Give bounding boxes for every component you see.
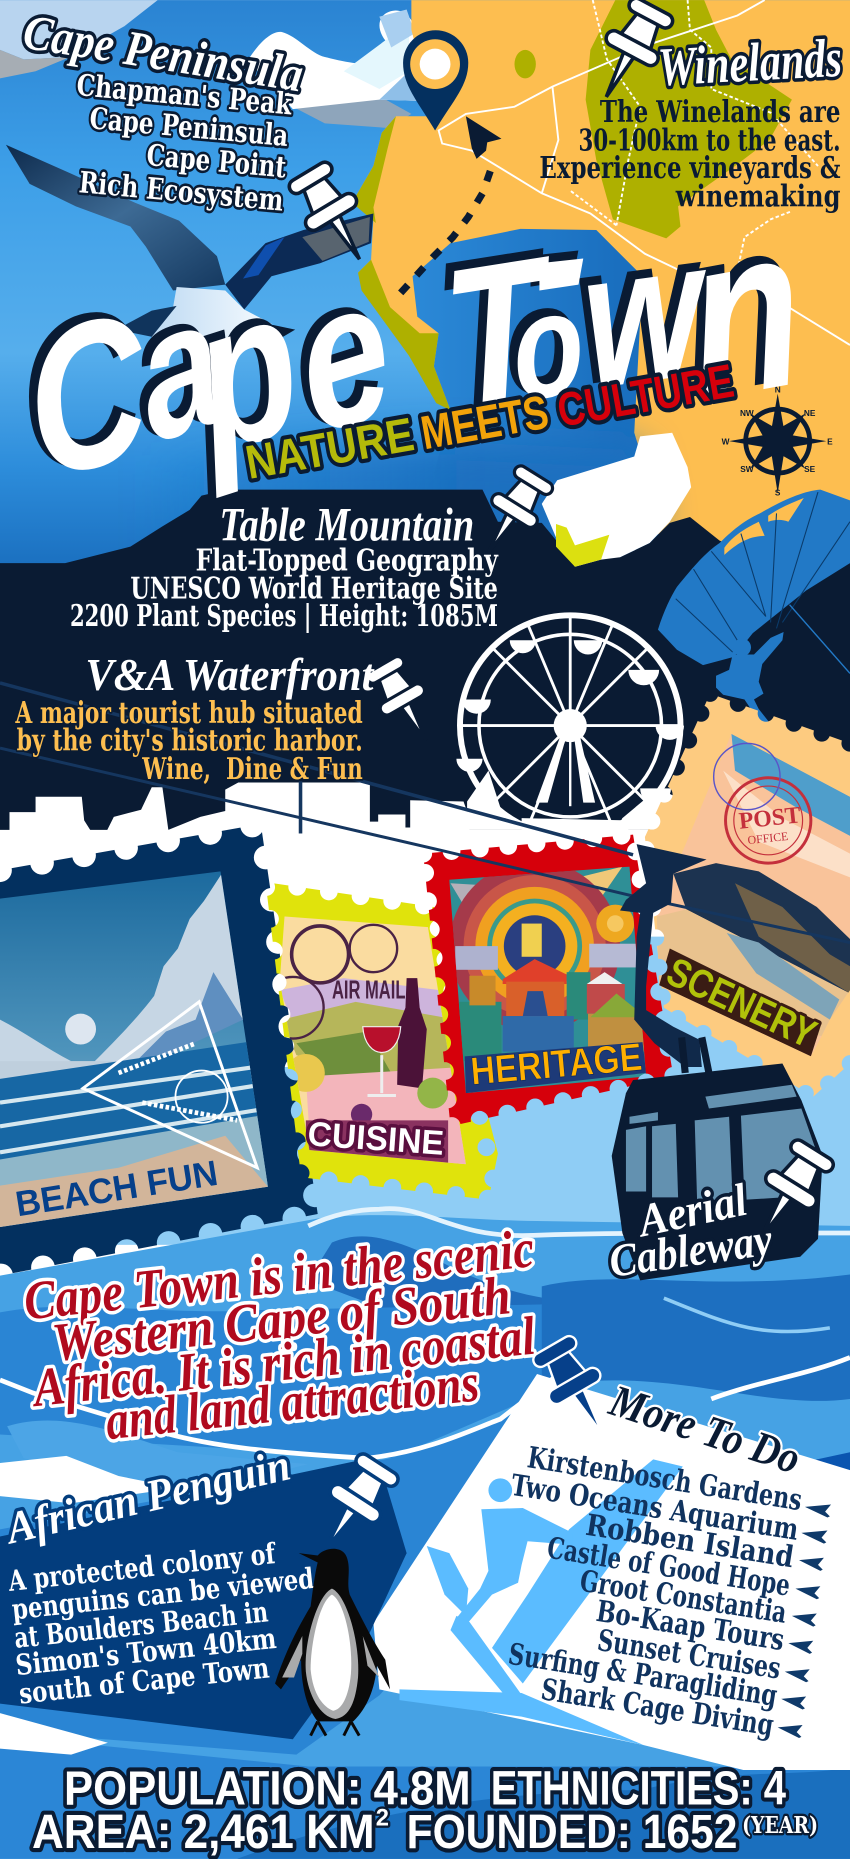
map: South Africa [542, 433, 691, 567]
label: Scenery: SCENERY [660, 949, 823, 1057]
icon: push pin More To Do [527, 1331, 627, 1448]
main title: Cape Town: p [172, 244, 316, 500]
heading: Table Mountain: Table Mountain [219, 500, 474, 552]
subtitle: Nature Meets Culture: CULTURE [553, 355, 738, 438]
stats: area and founded: AREA: 2,461 KM [32, 1805, 375, 1859]
mountain silhouette [0, 490, 850, 830]
label: Cuisine: CUISINE [306, 1115, 445, 1163]
sea waves [0, 1209, 850, 1859]
text: V&A description [15, 695, 363, 786]
text: penguin description: Simon's Town 40km [14, 1621, 278, 1682]
subtitle: Nature Meets Culture: MEETS [417, 386, 552, 460]
stamp: cuisine [262, 882, 498, 1200]
small olive blob [515, 50, 536, 78]
illustration: aerial cable car [612, 1037, 823, 1280]
icon: compass rose: SE [804, 464, 816, 474]
list: attractions [506, 1439, 805, 1743]
icon: push pin Aerial Cableway [738, 1135, 840, 1251]
stamp mark: post office: OFFICE [747, 829, 789, 847]
main title: Cape Town: o [499, 253, 583, 427]
subtitle: Nature Meets Culture: NATURE [242, 408, 418, 490]
text: V&A description: Wine, Dine & Fun [142, 751, 363, 786]
panel: More To Do [373, 1374, 850, 1770]
icon: push pin V&A Waterfront [361, 652, 447, 753]
icon: push pin Cape Peninsula [283, 157, 384, 274]
heading: Aerial Cableway [606, 1174, 776, 1287]
main title: Cape Town: n [669, 168, 806, 443]
icon: compass rose [722, 384, 833, 498]
icon: compass rose: SW [740, 464, 754, 474]
text: Table Mountain facts [70, 542, 499, 633]
heading: More To Do: More To Do [603, 1375, 806, 1484]
dotted route arrow [401, 116, 501, 293]
olive coast north [352, 116, 396, 223]
heading: Aerial Cableway: Cableway [606, 1213, 776, 1287]
icon: compass rose: E [827, 437, 833, 447]
main title: Cape Town: w [575, 197, 718, 430]
text: Cape Peninsula list: Chapman's Peak [75, 67, 294, 122]
text: V&A description: A major tourist hub situated [15, 695, 363, 730]
main title: Cape Town [7, 168, 813, 523]
main title: Cape Town: C [14, 269, 162, 523]
roads [439, 0, 850, 345]
stats: area and founded [32, 1805, 818, 1859]
heading: Aerial Cableway: Aerial [631, 1174, 751, 1247]
heading: V&A Waterfront: V&A Waterfront [85, 650, 375, 700]
icon: compass rose: NE [804, 408, 816, 418]
label: Beach Fun: BEACH FUN [13, 1153, 220, 1224]
stats: population and ethnicities: POPULATION: 4.8M [64, 1761, 471, 1815]
olive coast south [358, 260, 450, 410]
icon: push pin African Penguin [301, 1449, 405, 1565]
triangle postmark [83, 1002, 257, 1168]
main title: Cape Town: a [120, 257, 238, 481]
text: penguin description: penguins can be viewed [10, 1561, 316, 1626]
text: penguin description: A protected colony of [6, 1536, 278, 1598]
label: Heritage: HERITAGE [469, 1036, 644, 1094]
stats: area and founded: FOUNDED: 1652 [407, 1805, 737, 1859]
text: intro paragraph: and land attractions [103, 1351, 482, 1451]
list: attractions: Bo-Kaap Tours [594, 1593, 787, 1657]
main title: Cape Town: a [113, 252, 231, 476]
main title: Cape Town: p [165, 239, 309, 495]
main title: Cape Town: w [568, 191, 711, 424]
stamp: cuisine: AIR MAIL [332, 974, 405, 1004]
bay: False Bay [142, 229, 664, 581]
icon: push pin Table Mountain [467, 461, 559, 566]
panel: African Penguin [0, 1440, 407, 1739]
stats: area and founded: (YEAR) [742, 1811, 818, 1839]
main title: Cape Town: o [506, 259, 590, 433]
illustration: parachute [658, 490, 850, 737]
text: intro paragraph: Africa. It is rich in coastal [28, 1305, 539, 1418]
illustration: penguin [275, 1549, 390, 1736]
text: Cape Peninsula list: Cape Point [145, 137, 288, 185]
icon: map location pin [403, 30, 468, 130]
stamp mark: post office [714, 743, 811, 863]
text: Cape Peninsula list: Cape Peninsula [88, 100, 290, 153]
sky background [0, 0, 850, 569]
subtitle: Nature Meets Culture [242, 355, 738, 490]
icon: push pin Winelands [581, 0, 679, 110]
text: Table Mountain facts: UNESCO World Heritage Site [130, 571, 498, 606]
icon: compass rose: S [775, 488, 781, 498]
list: attractions: Shark Cage Diving [539, 1671, 776, 1743]
land: Western Cape map [352, 0, 850, 569]
heading: African Penguin: African Penguin [0, 1440, 295, 1554]
chevron markers [778, 1504, 831, 1738]
icon: compass rose: W [722, 437, 730, 447]
text: Cape Peninsula list [75, 67, 294, 218]
stats: population and ethnicities [64, 1761, 786, 1815]
heading: Cape Peninsula: Cape Peninsula [20, 4, 307, 102]
main title: Cape Town: n [676, 174, 813, 449]
stamp: heritage [423, 835, 673, 1126]
text: intro paragraph: Western Cape of South [49, 1264, 513, 1373]
main title: Cape Town: T [435, 213, 567, 459]
main title: Cape Town: e [280, 233, 407, 479]
illustration: surfer [400, 1459, 683, 1745]
text: Winelands description [539, 94, 841, 213]
list: attractions: Sunset Cruises [595, 1622, 783, 1686]
icon: compass rose: N [775, 384, 781, 394]
list: attractions: Robben Island [584, 1507, 797, 1574]
skyline silhouette [0, 782, 640, 1067]
illustration: Ferris wheel [456, 615, 684, 836]
main title: Cape Town: T [428, 207, 560, 453]
winelands region [586, 0, 792, 238]
stats: area and founded: 2 [376, 1806, 389, 1832]
text: intro paragraph [21, 1217, 539, 1451]
text: penguin description: south of Cape Town [17, 1650, 271, 1711]
light sea behind stamps [0, 937, 850, 1245]
text: intro paragraph: Cape Town is in the scenic [21, 1217, 537, 1331]
icon: compass rose: NW [740, 408, 754, 418]
stats: population and ethnicities: ETHNICITIES: 4 [491, 1761, 786, 1815]
skyline pole [299, 781, 302, 833]
illustration: seagull [6, 145, 373, 345]
text: Cape Peninsula list: Rich Ecosystem [78, 164, 285, 218]
stamp: scenery [640, 694, 850, 1097]
stamp: beach fun [0, 824, 318, 1276]
text: Table Mountain facts: 2200 Plant Species | Height: 1085M [70, 598, 498, 633]
clouds: centre [244, 10, 417, 128]
text: penguin description: at Boulders Beach in [13, 1594, 270, 1655]
cable car anchor shape [620, 844, 707, 1067]
text: penguin description [6, 1536, 316, 1711]
clouds: top left [0, 0, 158, 78]
cable lines [0, 683, 850, 943]
main title: Cape Town: C [7, 264, 155, 518]
main title: Cape Town: e [273, 228, 400, 474]
text: Table Mountain facts: Flat-Topped Geography [196, 542, 499, 577]
stamp mark: post office: POST [738, 802, 802, 835]
text: V&A description: by the city's historic harbor. [17, 722, 363, 757]
